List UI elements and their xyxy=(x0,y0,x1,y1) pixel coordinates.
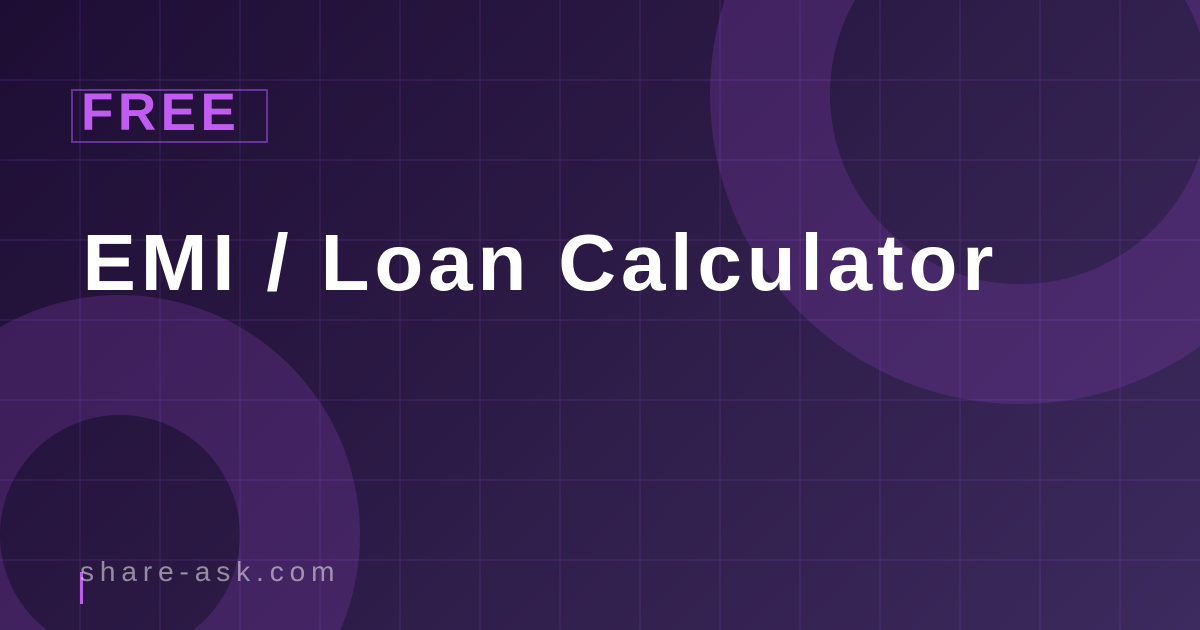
decorative ring: bottom left xyxy=(0,295,360,630)
badge text: FREE xyxy=(81,83,240,142)
badge: FREE xyxy=(71,89,268,143)
footer accent bar xyxy=(80,572,83,604)
title: EMI / Loan Calculator xyxy=(82,218,998,307)
site name: share-ask.com xyxy=(80,556,340,587)
decorative ring: top right xyxy=(710,0,1200,404)
